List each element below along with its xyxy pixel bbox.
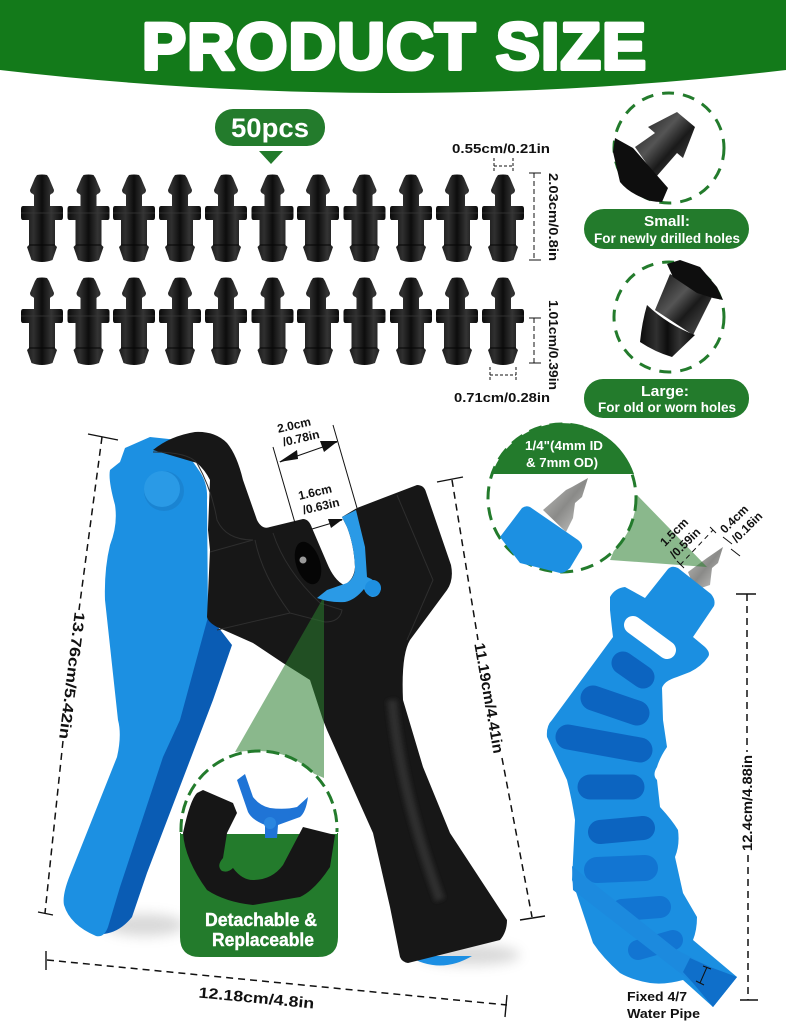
dimension: 13.76cm height [38,434,118,915]
dimension: 12.18cm width [46,951,507,1017]
dimension: jaw 1.6cm: 1.6cm [297,481,333,503]
dimension: connector width 0.71cm [454,367,550,405]
inset: large connector end [614,260,724,372]
bolt recess [290,538,326,588]
blue replaceable clip [317,510,381,602]
callout: detachable and replaceable: Replaceable [212,930,314,950]
label: large: For old or worn holes [598,400,736,415]
dimension: needle 1.5cm: 1.5cm [657,515,691,549]
dimension: connector width 0.55cm [452,141,550,171]
callout: detachable and replaceable: Detachable & [205,910,317,930]
dimension: jaw 1.6cm [297,481,343,529]
dimension: connector length 1.01cm [529,300,561,390]
tool: hole punch pliers [64,432,507,965]
dimension: connector length 1.01cm: 1.01cm/0.39in [546,300,561,390]
dimension: 12.4cm height: 12.4cm/4.88in [739,755,755,851]
label: small [584,209,749,249]
badge: 50pcs: 50pcs [231,113,309,143]
inset: punch needle: & 7mm OD) [526,455,598,470]
black clip seat [183,790,335,905]
inset: small connector end [613,93,724,203]
dimension: needle 0.4cm: /0.16in [729,509,765,545]
dimension: connector length 2.03cm [529,173,561,261]
green zoom cone to needle [610,495,707,567]
dimension: connector length 2.03cm: 2.03cm/0.8in [546,173,561,261]
dimension: jaw 1.6cm: /0.63in [301,495,341,517]
shadows under tools [105,914,520,965]
punch body [547,567,737,1007]
label: small: Small: [644,213,690,230]
inset: punch needle: 1/4"(4mm ID [525,438,603,453]
dimension: 12.4cm height [736,594,758,1000]
pipe channel [572,866,737,1007]
dimension: needle 1.5cm [657,515,716,568]
connectors row 1 [21,174,524,262]
dimension: 13.76cm height: 13.76cm/5.42in [55,611,88,740]
connectors row 2 [21,278,524,365]
channel width mark [696,966,711,985]
black handle body [153,432,507,963]
dimension: jaw 2.0cm: /0.78in [281,427,321,449]
dimension: 12.18cm width: 12.18cm/4.8in [198,985,315,1013]
dimension: 11.19cm height [437,477,545,920]
dimension: 11.19cm height: 11.19cm/4.41in [470,642,507,755]
green caption cap [492,423,634,474]
dimension: jaw 2.0cm: 2.0cm [276,414,312,436]
callout: detachable and replaceable [180,751,338,957]
label: small: For newly drilled holes [594,231,740,246]
grip recesses [568,663,673,950]
title: PRODUCT SIZE [142,9,646,83]
blue handle, rear dark side [104,610,232,934]
label: large: Large: [641,383,689,400]
inset needle [543,478,588,532]
badge: 50pcs [215,109,325,164]
header banner [0,0,786,93]
punch needle [688,547,723,590]
label: large [584,379,749,418]
dimension: needle 0.4cm: 0.4cm [717,502,751,536]
caption: fixed 4/7 water pipe [627,990,700,1021]
blue tip under black handle [408,956,472,966]
hanging slot [633,625,667,650]
blue clip part [237,774,308,838]
caption: fixed 4/7 water pipe: Fixed 4/7 [627,990,687,1004]
blue handle knob [144,471,184,511]
tool: drip hole punch [547,547,737,1007]
dimension: connector width 0.55cm: 0.55cm/0.21in [452,141,550,156]
dimension: needle 1.5cm: /0.59in [667,525,703,561]
inset: punch needle [488,423,636,573]
dimension: needle 0.4cm [717,502,765,556]
caption: fixed 4/7 water pipe: Water Pipe [627,1007,700,1021]
blue handle, front [64,437,208,936]
black handle contour lines [153,452,433,640]
dimension: connector width 0.71cm: 0.71cm/0.28in [454,390,550,405]
black handle highlight band [392,700,440,900]
green zoom cone to clip detail [235,600,324,778]
dimension: jaw 2.0cm [273,414,357,523]
inset blue head [500,506,582,573]
